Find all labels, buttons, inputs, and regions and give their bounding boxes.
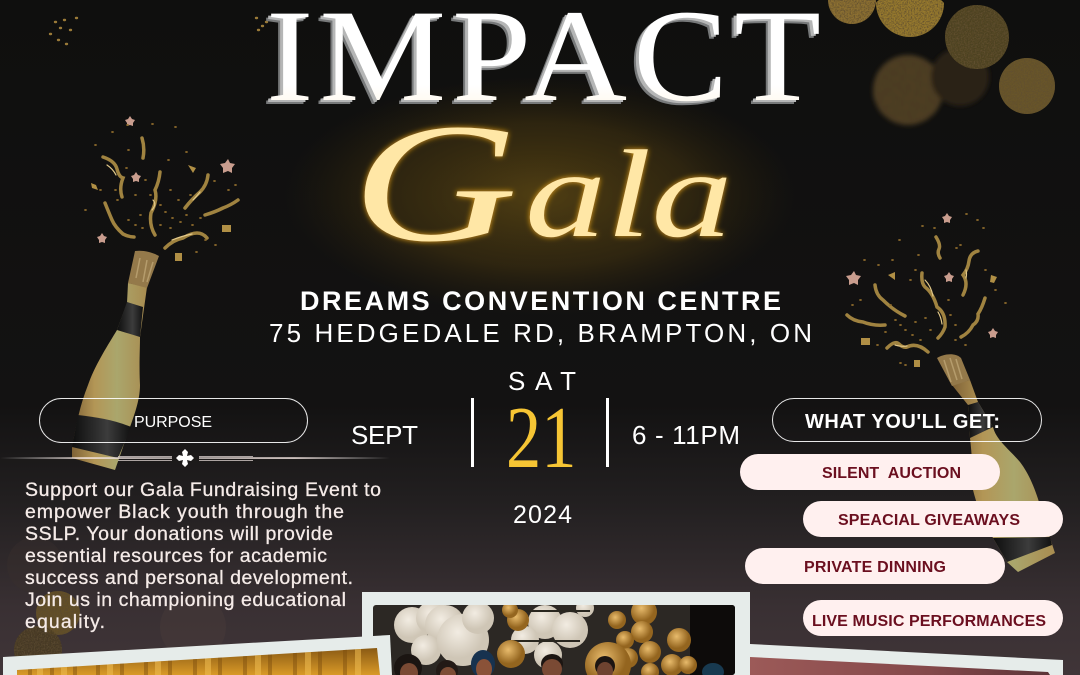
purpose text: empower Black youth through the xyxy=(25,501,344,523)
ornamental divider xyxy=(0,449,390,467)
purpose text: SSLP. Your donations will provide xyxy=(25,523,333,545)
confetti: left burst xyxy=(85,116,238,261)
photo: centre group xyxy=(362,592,750,675)
item: special giveaways: SPEACIAL GIVEAWAYS xyxy=(838,512,1020,529)
item: live music xyxy=(803,600,1063,636)
what you'll get heading: WHAT YOU'LL GET: xyxy=(805,411,1000,433)
bokeh lights: top right xyxy=(828,0,1055,125)
title: Gala script: ala xyxy=(525,126,733,264)
item: private dinning: PRIVATE DINNING xyxy=(804,559,946,576)
day number: 21 xyxy=(506,390,576,487)
gold dust top xyxy=(50,18,267,44)
title: Gala script xyxy=(352,88,733,277)
purpose text: equality. xyxy=(25,611,105,633)
venue address: 75 HEDGEDALE RD, BRAMPTON, ON xyxy=(269,318,812,348)
what you'll get pill xyxy=(772,398,1042,442)
champagne bottle: right xyxy=(937,354,1055,572)
day of week: SAT xyxy=(508,366,576,396)
photo: left curtain xyxy=(3,635,392,675)
purpose text: essential resources for academic xyxy=(25,545,327,567)
purpose label: PURPOSE xyxy=(134,414,212,431)
time: 6 - 11PM xyxy=(632,420,740,450)
purpose text xyxy=(25,479,381,633)
panel: purpose xyxy=(0,398,390,633)
item: silent auction xyxy=(740,454,1000,490)
purpose text: Join us in championing educational xyxy=(25,589,346,611)
month: SEPT xyxy=(351,420,418,450)
item: private dinning xyxy=(745,548,1005,584)
date block xyxy=(351,366,740,529)
item: special giveaways xyxy=(803,501,1063,537)
glow behind Gala xyxy=(285,75,795,315)
year: 2024 xyxy=(513,501,572,529)
venue name: DREAMS CONVENTION CENTRE xyxy=(300,286,781,316)
photo: right venue xyxy=(750,644,1063,675)
purpose pill xyxy=(40,398,308,442)
date dividers xyxy=(472,398,608,467)
purpose text: Support our Gala Fundraising Event to xyxy=(25,479,381,501)
purpose text: success and personal development. xyxy=(25,567,353,589)
panel: what you'll get xyxy=(740,398,1063,636)
title: Gala script: G xyxy=(352,88,518,277)
item: live music: LIVE MUSIC PERFORMANCES xyxy=(812,613,1046,630)
confetti: right burst xyxy=(846,213,1006,367)
champagne bottle: left xyxy=(72,251,159,470)
bokeh lights: lower left xyxy=(7,537,226,674)
item: silent auction: SILENT AUCTION xyxy=(822,465,961,482)
